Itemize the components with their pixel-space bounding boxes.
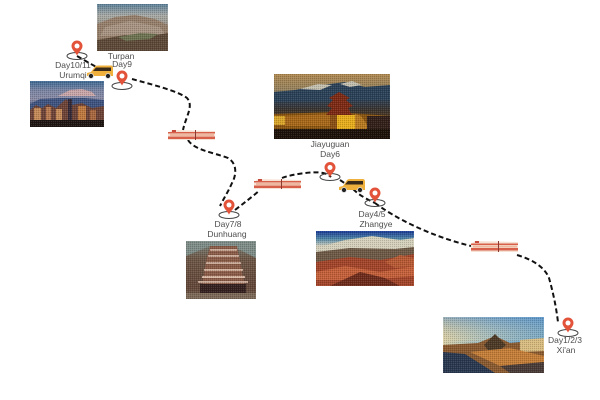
label: Jiayuguan: Jiayuguan: [311, 139, 350, 149]
pin: Jiayuguan: [320, 162, 340, 180]
pin: Zhangye: [365, 188, 385, 206]
photo: Urumqi: [30, 81, 104, 127]
label: Jiayuguan: Day6: [320, 149, 340, 159]
van: Jiayuguan to Zhangye: [339, 179, 365, 192]
photo: Turpan: [97, 4, 168, 51]
photo: Xi'an: [443, 317, 544, 373]
photo: Jiayuguan: [274, 74, 390, 139]
label: Turpan: Turpan: [108, 51, 135, 61]
train: Zhangye to Xi'an: [471, 241, 518, 252]
pin: Dunhuang: [219, 200, 239, 218]
label: Zhangye: Day4/5: [359, 209, 386, 219]
label: Dunhuang: Day7/8: [215, 219, 242, 229]
label: Urumqi: Day10/11: [55, 60, 91, 70]
train: Turpan to Dunhuang: [168, 130, 215, 140]
label: Xi'an: Xi'an: [557, 345, 576, 355]
van: Urumqi to Turpan: [87, 66, 113, 78]
train: Dunhuang to Jiayuguan: [254, 179, 301, 189]
label: Zhangye: Zhangye: [359, 219, 393, 229]
photo: Zhangye: [316, 231, 414, 286]
pin: Turpan: [112, 70, 132, 90]
pin: Xi'an: [558, 318, 578, 336]
label: Dunhuang: Dunhuang: [207, 229, 247, 239]
label: Turpan: Day9: [112, 59, 132, 69]
label: Xi'an: Day1/2/3: [548, 335, 582, 345]
route line: [77, 56, 558, 322]
photo: Dunhuang: [186, 241, 256, 299]
pin: Urumqi: [67, 41, 87, 60]
label: Urumqi: Urumqi: [59, 70, 87, 80]
